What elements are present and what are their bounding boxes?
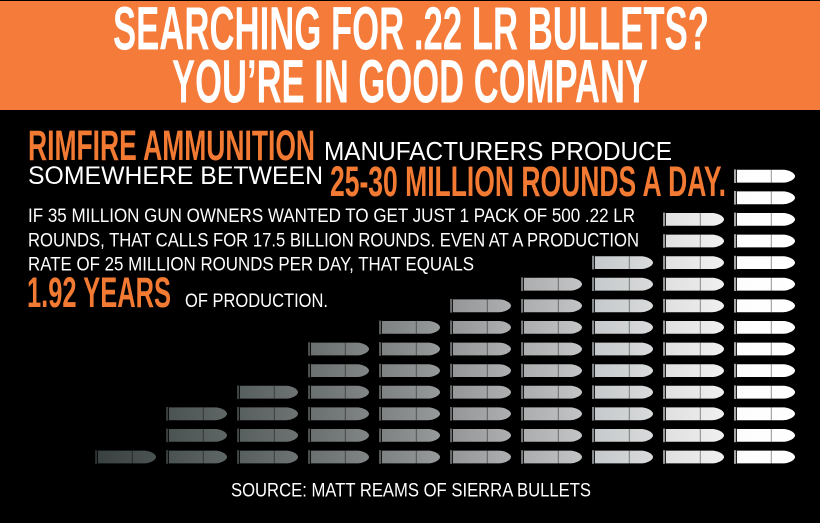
bullet column 10 xyxy=(734,169,795,464)
paragraph: production calculation xyxy=(28,206,639,276)
paragraph: production calculation: ROUNDS, THAT CALLS FOR 17.5 BILLION ROUNDS. EVEN AT A PRODUCTION xyxy=(28,230,639,252)
bullet column 9 xyxy=(663,213,724,464)
source credit: SOURCE: MATT REAMS OF SIERRA BULLETS xyxy=(231,480,591,502)
heading: rimfire ammunition: RIMFIRE AMMUNITION xyxy=(28,122,315,170)
bullet column 2 xyxy=(166,407,227,464)
bullet column 6 xyxy=(450,299,511,464)
bullet column 7 xyxy=(521,277,582,464)
paragraph: production calculation: IF 35 MILLION GUN OWNERS WANTED TO GET JUST 1 PACK OF 500 .22 LR xyxy=(28,206,635,227)
bullet column 3 xyxy=(237,385,298,464)
highlight: 1.92 years: 1.92 YEARS xyxy=(27,269,171,317)
bullet chart xyxy=(95,169,795,464)
text: manufacturers produce: MANUFACTURERS PRODUCE xyxy=(324,136,672,166)
paragraph: production calculation: RATE OF 25 MILLION ROUNDS PER DAY, THAT EQUALS xyxy=(28,254,474,276)
bullet column 1 xyxy=(95,450,156,464)
title banner xyxy=(0,0,820,116)
text: of production: OF PRODUCTION. xyxy=(185,291,328,312)
text: somewhere between: SOMEWHERE BETWEEN xyxy=(28,162,323,190)
bullet column 8 xyxy=(592,256,653,464)
bullet column 5 xyxy=(379,321,440,464)
bullet column 4 xyxy=(308,342,369,464)
